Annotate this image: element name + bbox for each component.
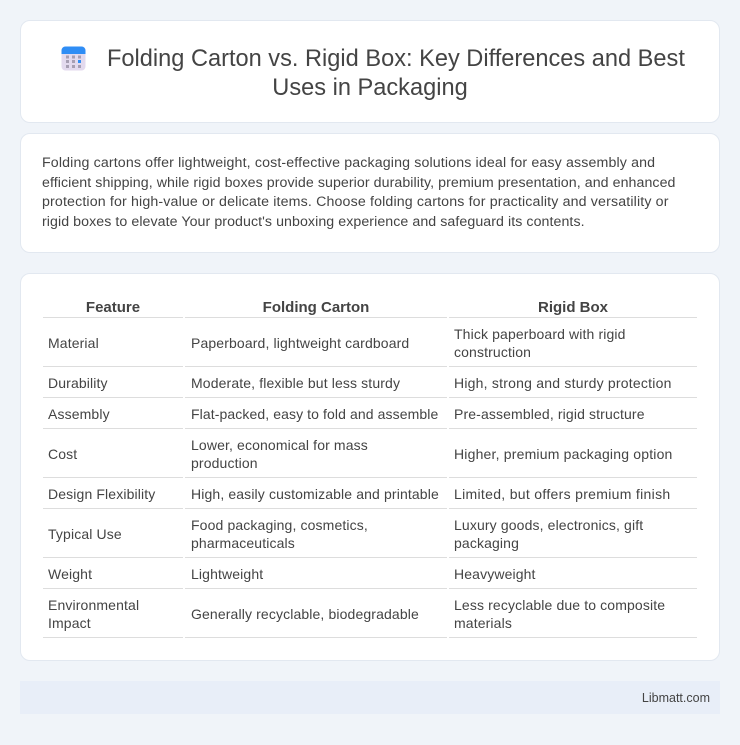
row: environmental impact: Environmental (48, 597, 139, 613)
comparison table panel: Luxury goods, electronics, gift (454, 517, 643, 533)
comparison table panel: Limited, but offers premium finish (454, 486, 670, 502)
comparison table panel: Pre-assembled, rigid structure (454, 406, 645, 422)
comparison table panel: Flat-packed, easy to fold and assemble (191, 406, 438, 422)
row: design flexibility: Design Flexibility (48, 486, 155, 502)
row: typical use: Typical Use (48, 526, 122, 542)
footer credit: Libmatt.com (642, 691, 710, 705)
row: environmental impact (48, 597, 139, 631)
comparison table panel: Less recyclable due to composite (454, 597, 665, 613)
comparison table panel: Lower, economical for mass (191, 437, 368, 453)
comparison table panel: Paperboard, lightweight cardboard (191, 335, 409, 351)
comparison table panel: Heavyweight (454, 566, 536, 582)
row: cost: Cost (48, 446, 77, 462)
comparison table panel: Thick paperboard with rigid (454, 326, 626, 342)
title: Uses in Packaging (272, 75, 468, 101)
comparison table panel: packaging (454, 535, 519, 551)
row: durability: Durability (48, 375, 108, 391)
intro text panel (20, 133, 720, 253)
comparison table panel: Moderate, flexible but less sturdy (191, 375, 400, 391)
comparison table panel: Folding Carton (263, 299, 369, 316)
table header row: Feature (86, 299, 140, 316)
header panel (20, 20, 720, 123)
comparison table panel: construction (454, 344, 531, 360)
comparison table panel: production (191, 455, 258, 471)
comparison table panel: Lightweight (191, 566, 263, 582)
title: Folding Carton vs. Rigid Box: Key Differences and Best (107, 46, 685, 72)
comparison table panel (20, 273, 720, 661)
intro paragraph: rigid boxes to elevate Your product's unboxing experience and safeguard its contents. (42, 214, 585, 230)
comparison table panel: High, strong and sturdy protection (454, 375, 672, 391)
comparison table panel: Food packaging, cosmetics, (191, 517, 368, 533)
comparison table panel: Higher, premium packaging option (454, 446, 673, 462)
comparison table panel: pharmaceuticals (191, 535, 295, 551)
title (107, 46, 685, 101)
footer bar (20, 681, 720, 714)
row: material: Material (48, 335, 99, 351)
row: assembly: Assembly (48, 406, 110, 422)
comparison table panel: Rigid Box (538, 299, 608, 316)
comparison table panel: Generally recyclable, biodegradable (191, 606, 419, 622)
comparison table panel: High, easily customizable and printable (191, 486, 439, 502)
intro paragraph (42, 155, 676, 230)
row: environmental impact: Impact (48, 615, 91, 631)
icon: calendar (62, 46, 86, 70)
intro paragraph: Folding cartons offer lightweight, cost-effective packaging solutions ideal for easy assembly and (42, 155, 655, 171)
comparison table panel: materials (454, 615, 512, 631)
row: weight: Weight (48, 566, 92, 582)
intro paragraph: protection for high-value or delicate items. Choose folding cartons for practicality and versatility or (42, 194, 669, 210)
intro paragraph: efficient shipping, while rigid boxes provide superior durability, premium presentation, and enhanced (42, 174, 676, 190)
